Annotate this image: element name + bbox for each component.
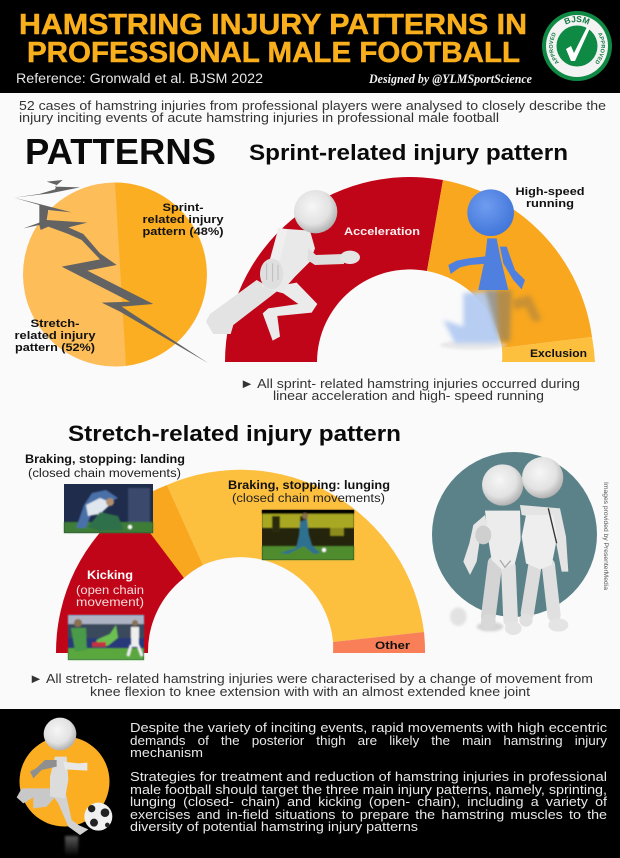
icon: lightning crack <box>14 180 208 363</box>
label: kicking: movement) <box>76 597 144 609</box>
heading: sprint pattern: Sprint-related injury pattern <box>249 140 568 165</box>
header band <box>0 0 620 93</box>
segment: other <box>333 632 425 653</box>
label: stretch share: Stretch- <box>30 318 80 330</box>
segment: exclusion <box>502 337 595 362</box>
icon: BJSM approved badge: APPROVED <box>549 32 560 64</box>
text: conclusions: Despite the variety of inciting events, rapid movements with high eccentric <box>130 720 608 735</box>
text: conclusions: exercises and in-field situations to prepare the hamstring muscles to the <box>130 807 607 822</box>
text: conclusions <box>130 720 608 834</box>
pie slice: stretch 52% <box>23 182 207 366</box>
heading: stretch pattern: Stretch-related injury pattern <box>68 421 401 446</box>
chart: sprint gauge <box>225 177 595 362</box>
segment: acceleration <box>225 177 443 362</box>
image credit: Images provided by PresenterMedia <box>602 482 609 590</box>
note: stretch pattern <box>29 671 593 699</box>
intro text: injury inciting events of acute hamstring injuries in professional male football <box>19 110 499 125</box>
text: conclusions: male football should target the three main injury patterns, namely, sprinting, <box>130 782 607 797</box>
label: braking lunging <box>228 480 390 505</box>
footer panel <box>0 709 620 858</box>
note: stretch pattern: ► All stretch- related hamstring injuries were characterised by a change of movement from <box>29 671 593 686</box>
segment: high-speed running <box>427 180 592 348</box>
label: other: Other <box>375 640 411 652</box>
note: sprint pattern <box>240 376 580 403</box>
label: kicking: Kicking <box>87 570 133 582</box>
title: PROFESSIONAL MALE FOOTBALL <box>27 37 520 69</box>
text: conclusions: diversity of potential hamstring injury patterns <box>130 819 419 834</box>
photo: landing <box>64 484 153 533</box>
icon: two supporting figures on teal circle <box>432 452 597 635</box>
chart: stretch gauge <box>56 470 425 653</box>
label: exclusion: Exclusion <box>530 348 587 360</box>
pie chart: injury patterns <box>14 180 225 366</box>
icon: BJSM approved badge <box>542 11 612 81</box>
icon: BJSM approved badge: BJSM <box>564 16 590 24</box>
label: braking lunging: (closed chain movements) <box>232 493 385 505</box>
icon: blue runner <box>440 189 542 350</box>
label: sprint share <box>142 202 225 238</box>
intro text <box>19 98 606 125</box>
label: kicking: (open chain <box>76 585 144 597</box>
label: braking landing: (closed chain movements) <box>28 468 181 480</box>
title: HAMSTRING INJURY PATTERNS IN <box>19 9 527 41</box>
note: sprint pattern: ► All sprint- related hamstring injuries occurred during <box>240 376 580 391</box>
label: braking landing <box>25 454 185 480</box>
note: sprint pattern: linear acceleration and high- speed running <box>273 388 544 403</box>
text: conclusions: Strategies for treatment and reduction of hamstring injuries in professional <box>130 769 607 784</box>
label: high-speed running: running <box>526 198 574 210</box>
icon: white runner holding hamstring <box>206 190 360 341</box>
icon: footballer kicking ball <box>17 718 112 856</box>
label: stretch share: pattern (52%) <box>15 342 95 354</box>
label: sprint share: related injury <box>142 214 225 226</box>
intro text: 52 cases of hamstring injuries from professional players were analysed to closely describe the <box>19 98 606 113</box>
label: high-speed running: High-speed <box>516 186 584 198</box>
title <box>19 9 527 69</box>
label: braking lunging: Braking, stopping: lunging <box>228 480 390 492</box>
heading: patterns: PATTERNS <box>25 131 216 172</box>
designer credit: Designed by @YLMSportScience <box>368 72 532 86</box>
text: conclusions: lunging (closed- chain) and kicking (open- chain), including a variety of <box>130 794 607 809</box>
label: braking landing: Braking, stopping: landing <box>25 454 185 466</box>
label: stretch share <box>14 318 97 354</box>
label: sprint share: Sprint- <box>162 202 204 214</box>
segment: kicking <box>56 505 184 653</box>
icon: BJSM approved badge: APPROVED <box>596 33 605 64</box>
label: stretch share: related injury <box>14 330 97 342</box>
label: sprint share: pattern (48%) <box>142 226 224 238</box>
text: conclusions: demands of the posterior thigh are likely the main hamstring injury <box>130 733 608 748</box>
text: conclusions: mechanism <box>130 745 203 760</box>
label: acceleration: Acceleration <box>344 226 420 238</box>
segment: braking lunging <box>167 470 424 642</box>
label: kicking <box>76 570 144 609</box>
photo: lunging <box>262 510 354 560</box>
segment: braking landing <box>129 485 203 578</box>
label: high-speed running <box>516 186 584 210</box>
photo: kicking <box>68 615 144 660</box>
note: stretch pattern: knee flexion to knee extension with with an almost extended knee joint <box>90 684 530 699</box>
reference: Reference: Gronwald et al. BJSM 2022 <box>16 71 263 86</box>
pie slice: sprint 48% <box>115 182 207 366</box>
